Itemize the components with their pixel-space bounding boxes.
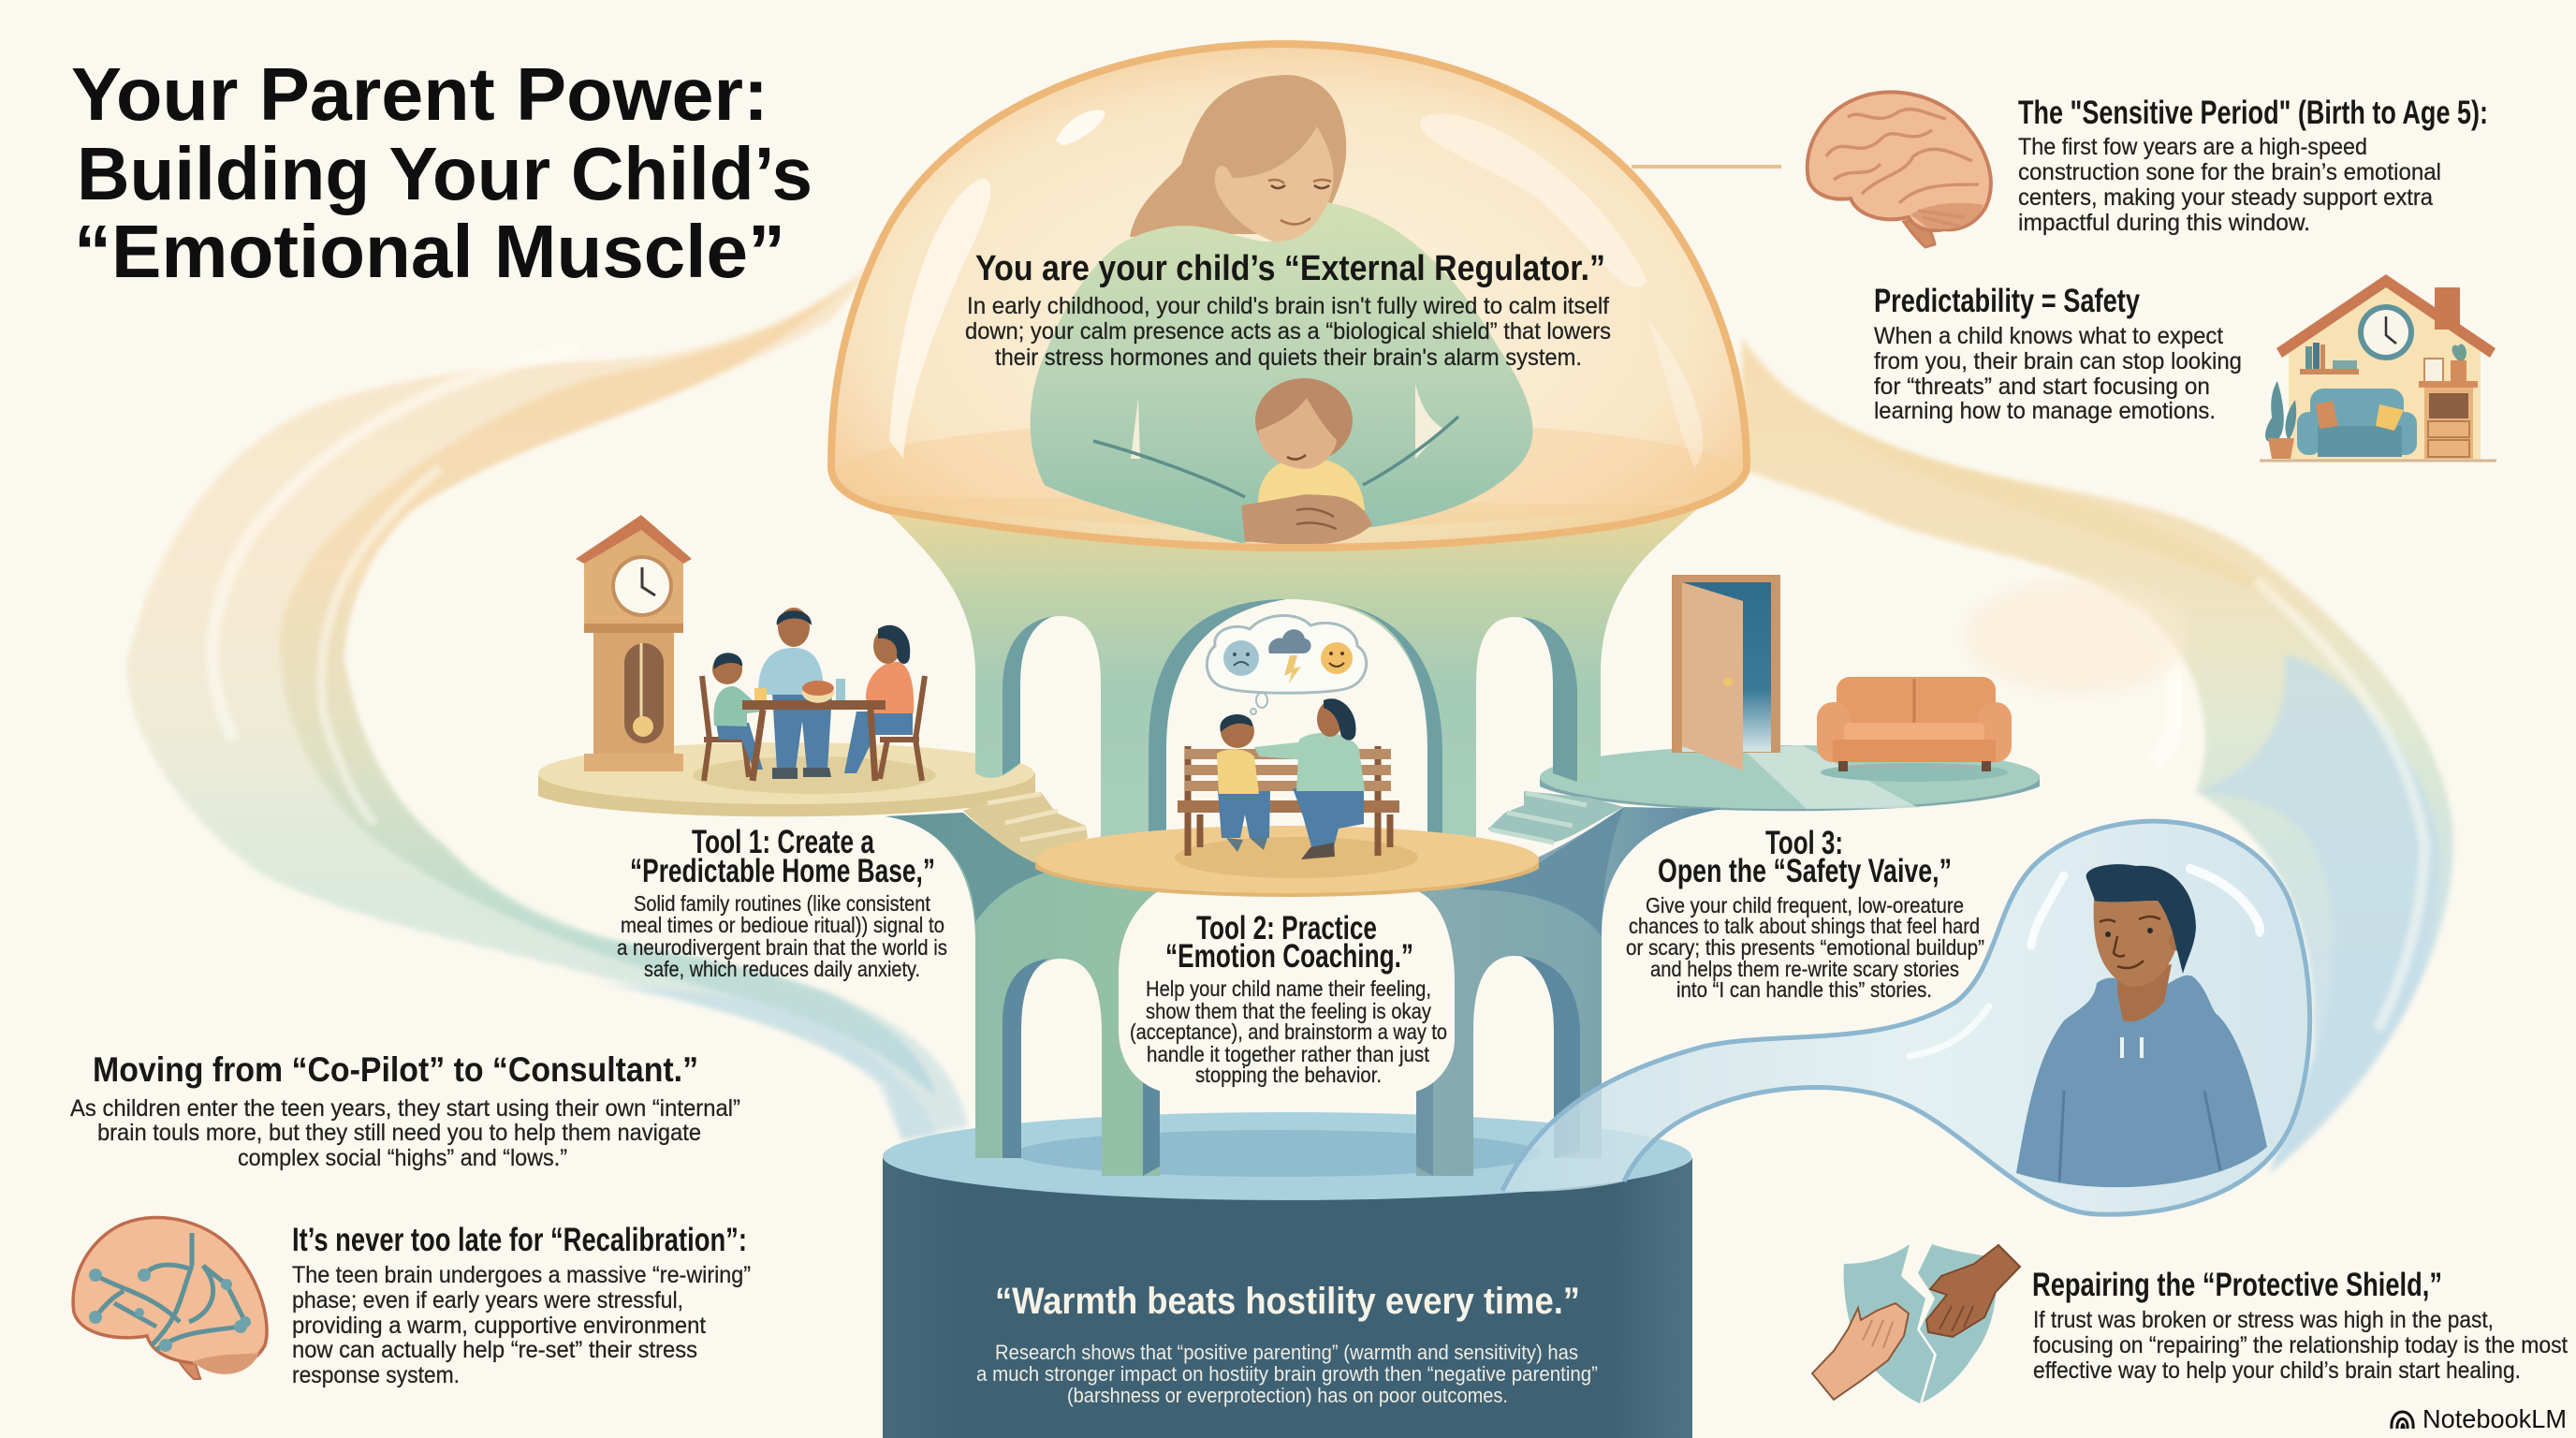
text block: warmth quote: (barshness or everprotection) has on poor outcomes. [1067, 1384, 1508, 1407]
icon: grandfather clock [576, 515, 692, 771]
foundation cylinder [883, 1112, 1692, 1438]
parent on bench [1254, 698, 1365, 859]
text block: repairing protective shield: Repairing the “Protective Shield,” [2032, 1267, 2442, 1303]
text block: warmth quote [976, 1281, 1598, 1407]
panel: tool 2 bubble backing [1119, 889, 1455, 1105]
text block: tool 3: Give your child frequent, low-oreature [1646, 893, 1964, 917]
text block: predictability [1874, 283, 2242, 424]
text block: tool 3: or scary; this presents “emotional buildup” [1626, 935, 1984, 960]
text block: recalibration: It’s never too late for “Recalibration”: [292, 1222, 747, 1258]
text block: sensitive period: centers, making your steady support extra [2018, 184, 2433, 211]
text block: tool 3: chances to talk about shings that feel hard [1629, 914, 1980, 938]
platform 1 stairs [963, 792, 1088, 863]
stairs to platform 3 [1487, 791, 1624, 843]
text block: recalibration [292, 1222, 751, 1388]
text block: tool 1: Solid family routines (like consistent [634, 891, 931, 916]
teen figure in hoodie [2016, 864, 2267, 1187]
text block: predictability: Predictability = Safety [1874, 283, 2140, 319]
right flowing swirl [1742, 338, 2453, 1172]
text block: warmth quote: Research shows that “positive parenting” (warmth and sensitivity) has [995, 1341, 1578, 1364]
text block: tool 1: safe, which reduces daily anxiety. [644, 957, 920, 981]
text block: sensitive period [2018, 95, 2488, 236]
cylinder rim [883, 1112, 1691, 1200]
upper arch side faces [1003, 616, 1053, 775]
NotebookLM logo: NotebookLM [2422, 1404, 2567, 1433]
dome inner floor [842, 418, 1736, 527]
right swirl yellow band [1742, 338, 2310, 616]
title [71, 52, 812, 293]
text block: warmth quote: “Warmth beats hostility every time.” [995, 1281, 1580, 1322]
central platform with coaching scene [1035, 615, 1539, 897]
teen in protective bubble [1502, 821, 2310, 1214]
text block: tool 2: stopping the behavior. [1195, 1063, 1382, 1087]
text block: sensitive period: construction sone for the brain’s emotional [2018, 159, 2441, 185]
text block: tool 3: into “I can handle this” stories. [1676, 977, 1932, 1002]
text block: tool 2 [1130, 910, 1447, 1087]
text block: external regulator: You are your child’s “External Regulator.” [975, 249, 1605, 288]
text block: moving from co-pilot to consultant: Moving from “Co-Pilot” to “Consultant.” [93, 1050, 698, 1089]
upper tower canopy and columns [873, 496, 1701, 853]
platform 3 with door and sofa [1540, 575, 2040, 811]
bubble and flowing tube outline [1502, 821, 2310, 1214]
text block: repairing protective shield: If trust was broken or stress was high in the past, [2033, 1307, 2494, 1333]
shaded undersides of platforms [1460, 807, 1624, 936]
text block: tool 3: Open the “Safety Vaive,” [1658, 853, 1952, 889]
icon: brain with neural pathways [73, 1217, 267, 1379]
text block: external regulator: In early childhood, your child's brain isn't fully wired to calm itself [967, 293, 1609, 319]
text block: predictability: learning how to manage emotions. [1874, 398, 2216, 424]
dome highlights [889, 110, 1703, 468]
wooden bench [1178, 746, 1399, 856]
text block: repairing protective shield [2032, 1267, 2568, 1384]
child in arms [1241, 378, 1372, 545]
text block: tool 2: “Emotion Coaching.” [1165, 938, 1413, 975]
text block: tool 1: meal times or bedioue ritual)) signal to [621, 913, 944, 937]
text block: predictability: from you, their brain can stop looking [1874, 348, 2242, 374]
title: Your Parent Power: [71, 52, 768, 136]
text block: repairing protective shield: effective way to help your child’s brain start healing. [2033, 1357, 2521, 1384]
text block: tool 2: Help your child name their feeling, [1146, 976, 1431, 1001]
thought bubble with emotions [1207, 615, 1367, 714]
icon: orange sofa [1817, 677, 2012, 771]
left swirl strong band [279, 251, 936, 1095]
child on bench [1217, 714, 1270, 852]
mother [1031, 75, 1532, 543]
text block: recalibration: providing a warm, cupportive environment [292, 1313, 706, 1339]
icon: open door [1672, 575, 1780, 770]
connector line from dome to brain [1632, 165, 1781, 169]
text block: moving from co-pilot to consultant [70, 1050, 740, 1171]
text block: tool 1: a neurodivergent brain that the world is [617, 935, 947, 960]
lower tower structure [886, 807, 1722, 1176]
text block: predictability: for “threats” and start focusing on [1874, 374, 2210, 400]
dome glass [831, 44, 1747, 548]
text block: tool 3 [1626, 825, 1984, 1002]
icon: house [2260, 274, 2496, 461]
lower arch side faces [1003, 959, 1048, 1158]
text block: tool 1: “Predictable Home Base,” [630, 853, 935, 889]
icon: broken shield and hands [1812, 1244, 2020, 1403]
text block: moving from co-pilot to consultant: As children enter the teen years, they start using their own “internal” [70, 1095, 740, 1122]
bubble and flowing tube fill [1502, 821, 2310, 1214]
central platform disc [1035, 826, 1539, 897]
title: Building Your Child’s [77, 132, 812, 215]
text block: tool 2: handle it together rather than just [1147, 1042, 1430, 1066]
text block: external regulator [965, 249, 1611, 371]
left flowing swirl [127, 251, 968, 1139]
text block: recalibration: phase; even if early years were stressful, [292, 1287, 683, 1313]
text block: tool 3: Tool 3: [1765, 825, 1843, 861]
text block: tool 2: show them that the feeling is okay [1146, 999, 1431, 1023]
platform 1 with family routine scene [538, 515, 1035, 816]
platform 1 disc [538, 742, 1035, 816]
right swirl blue lobe [2196, 655, 2440, 1172]
text block: moving from co-pilot to consultant: complex social “highs” and “lows.” [238, 1145, 567, 1171]
text block: moving from co-pilot to consultant: brain touls more, but they still need you to help them navigate [97, 1120, 701, 1146]
text block: recalibration: response system. [292, 1362, 460, 1388]
text block: tool 1 [617, 824, 947, 981]
dome rim [831, 44, 1747, 548]
parental dome [831, 44, 1747, 548]
family at the table [702, 608, 925, 781]
text block: tool 3: and helps them re-write scary stories [1650, 957, 1959, 981]
text block: tool 1: Tool 1: Create a [692, 824, 874, 860]
title: “Emotional Muscle” [74, 210, 785, 293]
text block: external regulator: their stress hormones and quiets their brain's alarm system. [995, 345, 1582, 371]
text block: predictability: When a child knows what to expect [1874, 323, 2223, 349]
text block: recalibration: now can actually help “re-set” their stress [292, 1337, 697, 1363]
text block: external regulator: down; your calm presence acts as a “biological shield” that lowers [965, 318, 1611, 345]
icon: brain [1808, 92, 1991, 247]
text block: warmth quote: a much stronger impact on hostiity brain growth then “negative parenting” [976, 1362, 1598, 1386]
bubble highlights [1910, 869, 2264, 1056]
text block: tool 2: Tool 2: Practice [1196, 910, 1377, 946]
platform 3 disc [1540, 745, 2040, 811]
text block: sensitive period: The first fow years are a high-speed [2018, 134, 2367, 160]
cylinder body [883, 1156, 1692, 1438]
text block: recalibration: The teen brain undergoes a massive “re-wiring” [292, 1262, 751, 1288]
text block: tool 2: (acceptance), and brainstorm a way to [1130, 1020, 1447, 1044]
text block: sensitive period: impactful during this window. [2018, 210, 2310, 236]
